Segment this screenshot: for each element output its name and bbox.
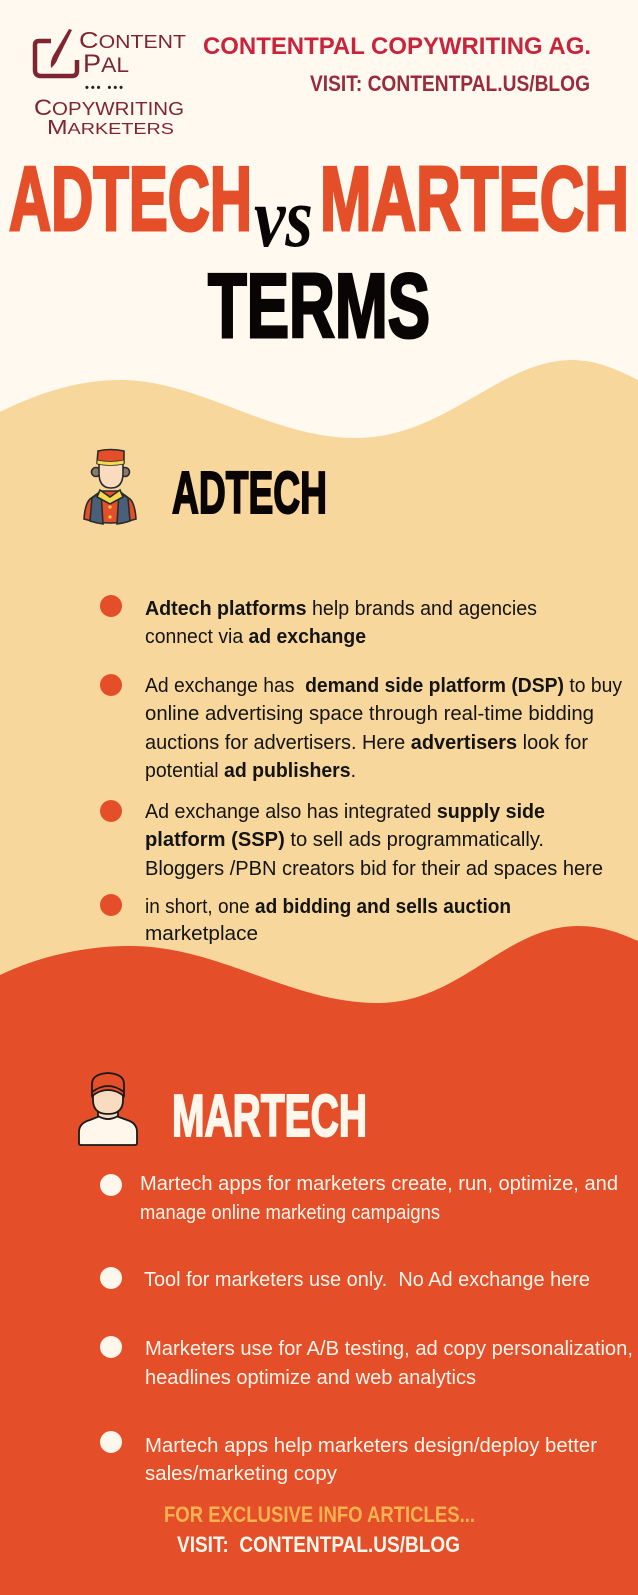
- bullet item 1: [100, 595, 537, 648]
- bullet item 3: [100, 1336, 633, 1389]
- panel: martech background wave: [0, 926, 638, 1595]
- list: adtech bullets: [100, 595, 622, 945]
- bullet item 2: [100, 674, 622, 782]
- logo icon: pen and frame: [35, 29, 77, 76]
- heading: martech: MARTECH: [172, 1083, 367, 1149]
- bullet item 4: in short, one ad bidding and sells auction: [145, 896, 511, 918]
- icon: man with cap martech: [79, 1073, 137, 1145]
- logo: [34, 27, 186, 139]
- bullet item 1: Martech apps for marketers create, run, optimize, and: [140, 1173, 618, 1195]
- bullet item 2: potential ad publishers.: [145, 760, 356, 782]
- panel: adtech background wave: [0, 360, 638, 1020]
- heading: adtech: ADTECH: [172, 460, 327, 526]
- footer: call to action: FOR EXCLUSIVE INFO ARTICLES...: [164, 1502, 475, 1527]
- logo wordmark: pal: PAL: [83, 50, 129, 78]
- bullet item 3: headlines optimize and web analytics: [145, 1367, 476, 1389]
- title: adtech: ADTECH: [9, 149, 252, 250]
- bullet item 4: [100, 894, 511, 945]
- bullet item 1: Adtech platforms help brands and agencies: [145, 598, 537, 620]
- bullet item 2: auctions for advertisers. Here advertisers look for: [145, 732, 588, 754]
- logo wordmark: copywriting: COPYWRITING: [34, 95, 184, 120]
- bullet item 2: Ad exchange has demand side platform (DSP) to buy: [145, 675, 622, 697]
- bullet item 4: [100, 1431, 597, 1485]
- bullet item 3: Ad exchange also has integrated supply side: [145, 801, 545, 823]
- bullet item 2: Tool for marketers use only. No Ad exchange here: [144, 1269, 590, 1291]
- bullet item 4: sales/marketing copy: [145, 1463, 337, 1485]
- logo dots: ••• •••: [85, 82, 123, 94]
- footer: visit link: VISIT: CONTENTPAL.US/BLOG: [177, 1532, 460, 1557]
- title: vs: vs: [254, 169, 313, 265]
- bullet item 2: online advertising space through real-time bidding: [145, 703, 594, 725]
- logo wordmark: marketers: MARKETERS: [47, 117, 174, 139]
- bullet item 3: platform (SSP) to sell ads programmatically.: [145, 829, 544, 851]
- bullet item 3: Bloggers /PBN creators bid for their ad spaces here: [145, 858, 603, 880]
- icon: bellhop adtech: [84, 450, 136, 524]
- bullet item 4: Martech apps help marketers design/deploy better: [145, 1435, 597, 1457]
- text: visit link: VISIT: CONTENTPAL.US/BLOG: [310, 71, 590, 96]
- bullet item 1: manage online marketing campaigns: [140, 1202, 440, 1224]
- bullet item 1: connect via ad exchange: [145, 626, 366, 648]
- title: terms: TERMS: [208, 256, 430, 357]
- logo wordmark: content: CONTENT: [79, 27, 186, 53]
- bullet item 3: [100, 800, 603, 880]
- heading: company name: CONTENTPAL COPYWRITING AG.: [203, 33, 591, 60]
- list: martech bullets: [100, 1173, 633, 1485]
- bullet item 4: marketplace: [145, 923, 258, 945]
- bullet item 1: [100, 1173, 618, 1224]
- bullet item 3: Marketers use for A/B testing, ad copy personalization,: [145, 1338, 633, 1360]
